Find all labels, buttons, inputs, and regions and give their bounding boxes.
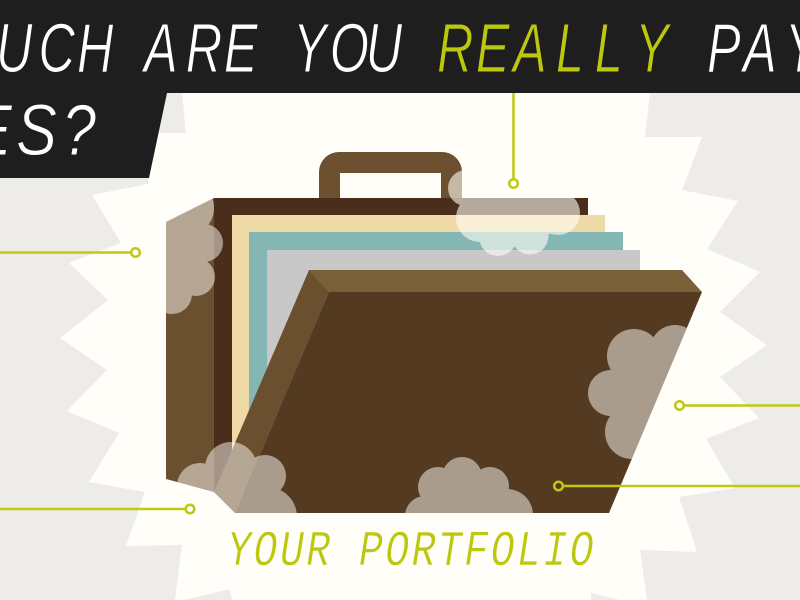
callout line: upper left bbox=[0, 248, 140, 257]
cloud: lower left corner bbox=[177, 442, 297, 513]
briefcase side bbox=[166, 198, 214, 492]
callout line: lower right bbox=[554, 482, 800, 490]
briefcase top flap bbox=[309, 270, 702, 292]
title text line one: YOU bbox=[293, 9, 403, 87]
title text line one: REALLY bbox=[437, 9, 672, 87]
briefcase handle bbox=[319, 152, 462, 198]
title text line one: ARE bbox=[142, 9, 259, 87]
callout line: lower left bbox=[0, 505, 194, 513]
cloud: top of case bbox=[448, 170, 580, 256]
callout line: top bbox=[509, 93, 518, 188]
briefcase illustration bbox=[166, 152, 702, 513]
grey document bbox=[267, 250, 640, 370]
cloud: right edge bbox=[588, 325, 687, 459]
briefcase back bbox=[214, 198, 588, 492]
teal document bbox=[249, 232, 623, 420]
starburst panel bbox=[60, 93, 767, 600]
cloud: side of case bbox=[166, 199, 223, 314]
briefcase front bbox=[235, 292, 702, 513]
briefcase left flap bbox=[214, 270, 329, 513]
title banner bbox=[0, 0, 800, 178]
portfolio label: YOUR PORTFOLIO bbox=[227, 523, 594, 580]
callout line: right bbox=[675, 401, 800, 410]
cloud: bottom centre bbox=[405, 457, 533, 513]
title text line one bbox=[0, 9, 800, 87]
cream document bbox=[232, 215, 605, 470]
